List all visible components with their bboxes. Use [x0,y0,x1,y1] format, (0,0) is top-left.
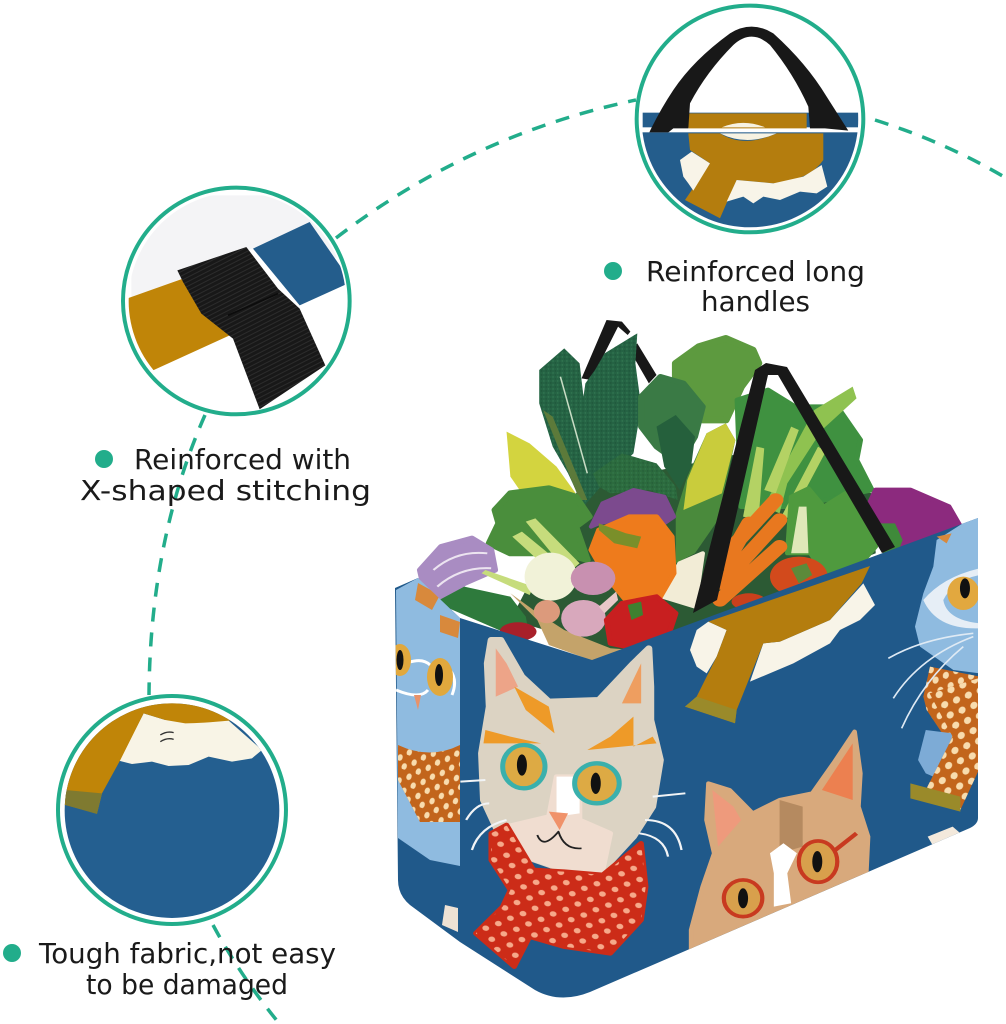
basket [510,593,633,662]
turnip [662,553,703,607]
blue cat with orange scarf [888,517,980,740]
vegetables and back handle [420,320,960,662]
mustard scarf and white fur at bag top [685,566,875,723]
bag pattern [460,517,983,967]
side cat [389,578,460,932]
right greens [737,390,872,507]
red polka-dot scarf [476,825,646,967]
label: tough fabric: to be damaged [86,968,288,1001]
label: x-shaped stitching: X-shaped stitching [80,474,371,507]
label: tough fabric: Tough fabric,not easy [38,937,336,970]
orange pepper [591,517,674,600]
back handle [582,320,657,383]
detail circle: tough fabric [52,690,292,924]
red cabbage right [868,490,960,550]
spinach [439,587,530,637]
detail circle: long handles [630,6,870,242]
shopping bag with vegetables [389,320,983,998]
dashed connector arcs [149,100,1006,1022]
bag side panel [395,578,460,942]
cat with teal glasses [482,640,660,870]
blue cat scarf tail [910,677,983,847]
detail circle: x-shaped stitching [123,188,351,414]
chinese cabbage [676,423,735,563]
label: tough fabric [3,937,336,1001]
bok choy [787,488,876,577]
chicory and asparagus [507,432,576,493]
broccoli [489,488,589,560]
purple cabbage center [591,490,674,527]
pile base [510,453,876,653]
left cabbage [420,538,495,603]
label: x-shaped stitching: Reinforced with [134,443,351,476]
garlic [571,562,615,595]
bag front panel [460,518,978,998]
carrots [720,500,780,600]
kale leaves [539,333,641,507]
shallot [534,600,560,623]
fennel [482,518,580,595]
label: reinforced long handles [604,255,865,318]
front handle [693,363,895,613]
cat with red glasses [691,732,868,953]
cats in bag pattern [460,640,868,967]
label: reinforced long handles: Reinforced long [646,255,865,288]
radish [500,622,537,641]
red pepper [607,597,676,647]
tomato [770,557,828,597]
label: reinforced long handles: handles [701,285,810,318]
label: x-shaped stitching [80,443,371,507]
